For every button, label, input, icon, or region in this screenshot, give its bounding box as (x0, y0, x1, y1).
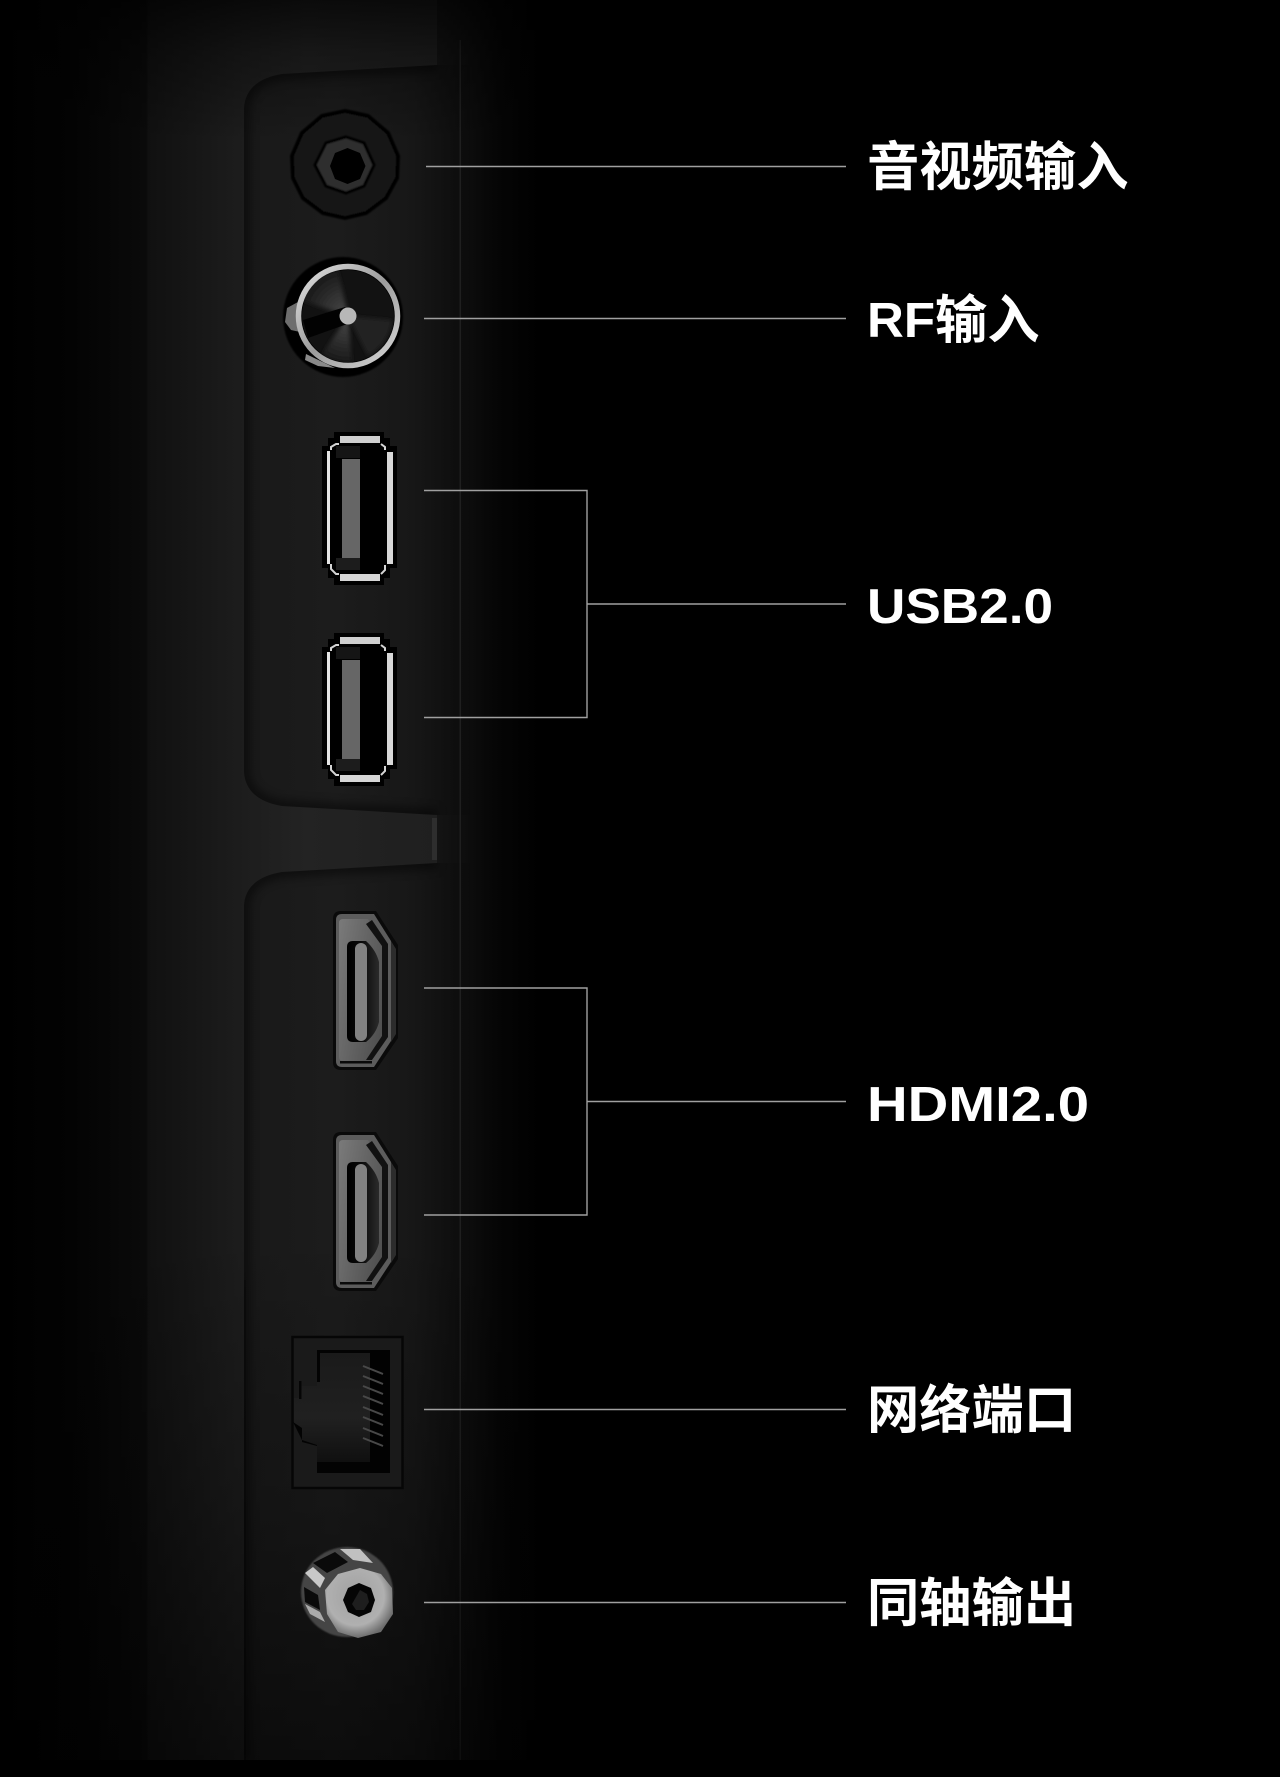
recess strip end highlight (432, 818, 437, 860)
icon: audio/video input jack (292, 111, 398, 218)
label: coaxial output: 同轴输出 (867, 1561, 1076, 1637)
label: RF input: RF (867, 294, 935, 348)
seam lines on rear cover (146, 0, 461, 1760)
icon: HDMI port upper (333, 911, 398, 1070)
leader line: coaxial output (424, 1602, 846, 1604)
icon: USB port upper (322, 432, 397, 585)
icon: RJ45 network port (292, 1337, 402, 1488)
label: HDMI2.0: HDMI2.0 (867, 1078, 1089, 1132)
top and bottom fade (0, 0, 600, 1760)
panel: upper port bay (244, 65, 437, 815)
icon: USB port lower (322, 633, 397, 786)
icon: RF coaxial input (283, 257, 403, 377)
label: network port: 网络端口 (867, 1368, 1076, 1444)
bracket: HDMI ports (424, 988, 846, 1215)
icon: coaxial audio output (301, 1547, 393, 1638)
leader line: audio/video input (426, 166, 846, 168)
label: RF input (867, 278, 1040, 354)
bracket: USB ports (424, 490, 846, 718)
label: USB2.0: USB2.0 (867, 580, 1053, 634)
leader line: RF input (424, 318, 846, 320)
label: audio video input: 音视频输入 (867, 125, 1128, 201)
leader line: network port (424, 1408, 846, 1410)
icon: HDMI port lower (333, 1132, 398, 1291)
panel: lower port bay (244, 863, 437, 1662)
infographic canvas (126, 0, 1128, 1760)
label: RF input: 输入 (935, 278, 1040, 354)
